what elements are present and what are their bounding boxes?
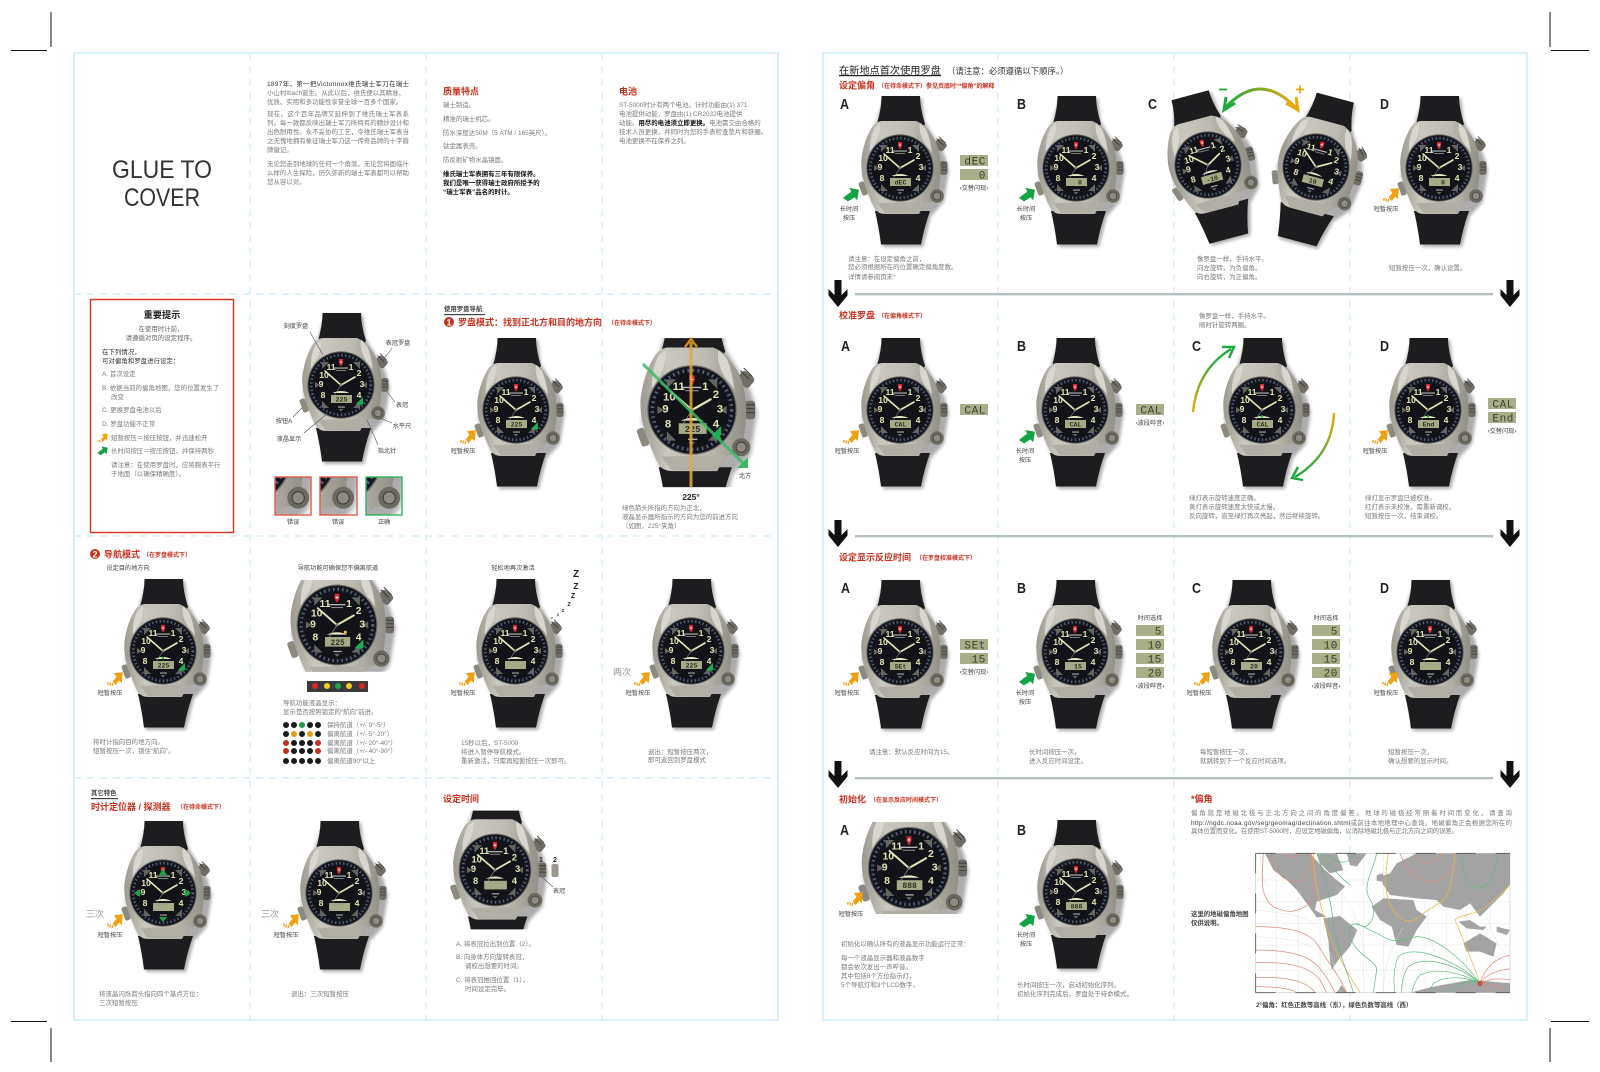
heading: other features: （在待命模式下） — [177, 803, 225, 811]
step B: initialization: 长时间 — [1017, 931, 1035, 939]
panel: set time: 表冠 — [553, 887, 565, 895]
section divider 1 — [828, 280, 1520, 307]
step C: rotate twice: 反向旋转，直至绿灯再次亮起，然后继续旋转。 — [1189, 511, 1324, 520]
text block: brand history: 出色耐用性。永不妥协的工艺，令维氏瑞士军表当 — [267, 127, 409, 136]
heading: initialization — [839, 794, 942, 804]
step D: calibration end: End — [1492, 414, 1514, 426]
step D: calibration end: 短暂按压一次，结束调校。 — [1365, 511, 1442, 520]
step C: response time: 短暂按压 — [1187, 689, 1211, 697]
watch: exit navigation — [613, 579, 740, 764]
step D: calibration end — [1363, 338, 1516, 520]
heading: other features: 其它特色 — [91, 788, 117, 797]
step B: declination — [1017, 96, 1125, 247]
step A: declination: 按压 — [843, 214, 855, 222]
step B: response time: 进入反应时间设定。 — [1029, 756, 1087, 765]
watch: locator on: 短暂按压 — [98, 931, 122, 939]
figure: watch anatomy: 指北针 — [378, 447, 396, 455]
glue to cover note: GLUE TO — [112, 156, 212, 184]
panel: important notice: 可对偏角和罗盘进行设定： — [102, 356, 179, 365]
watch: easy reactivation: 重新激活，只需再短暂按压一次即可。 — [461, 756, 570, 765]
step D: confirm: 短暂按压一次，确认设置。 — [1389, 263, 1466, 272]
watch: easy reactivation: 短暂按压 — [451, 689, 475, 697]
step A: declination: 您必须根据所在的位置确定偏角度数。 — [848, 262, 957, 271]
watch: stay on course with LED legend: 偏离航道（+/- 5°-20°） — [327, 729, 393, 738]
step A: initialization: 5个导航灯和3个LCD数字。 — [841, 980, 919, 989]
step A: declination: 0 — [979, 170, 986, 182]
step A: declination: ‹交替闪现› — [960, 184, 988, 192]
panel: set time: 调校出想要的时间。 — [465, 961, 523, 970]
text block: brand history: 小山村Ibach诞生。从此以后，维氏便以其精准、 — [267, 88, 405, 97]
panel: important notice: 请注意：在使用罗盘时，应将腕表平行 — [111, 460, 221, 469]
step C: response time: 20 — [1324, 668, 1338, 680]
watch: easy reactivation: 将进入暂停导航模式。 — [461, 747, 525, 756]
step C: rotate to adjust: 向左旋转，为负偏角。 — [1197, 263, 1261, 272]
text block: declination explanation: 仅供说明。 — [1191, 918, 1223, 927]
watch: stay on course with LED legend — [283, 564, 398, 764]
watch: locator on — [86, 821, 212, 1007]
step A: initialization: 初始化以确认所有的液晶显示功能运行正常： — [841, 939, 970, 948]
watch: locator on: 将液晶闪烁箭头指向四个基点方位： — [99, 989, 202, 998]
heading: set declination: （在待命模式下）参见页底时“*偏角”的解释 — [878, 82, 994, 90]
text block: brand history: 您从容以对。 — [267, 177, 306, 186]
watch: easy reactivation: Z — [571, 593, 576, 600]
watch: easy reactivation: Z — [573, 581, 579, 591]
step D: calibration end: D — [1380, 338, 1389, 355]
watch: set destination: 225 — [158, 662, 169, 670]
step C: response time: 20 — [1250, 664, 1258, 670]
step A: declination: dEC — [964, 156, 986, 168]
panel: set time: B. 向身体方向旋转表冠， — [456, 952, 528, 961]
step A: initialization: 都会依次发出一声哔音。 — [841, 962, 912, 971]
step C: response time: 15 — [1324, 654, 1338, 666]
text block: quality features: 防水深度达50M（5 ATM / 165英尺）。 — [443, 128, 551, 137]
heading: set declination — [839, 80, 994, 90]
text block: declination explanation: 这里的地磁偏角地图 — [1191, 909, 1249, 918]
heading: display response time: 设定显示反应时间 — [839, 552, 911, 562]
step A: declination — [840, 96, 988, 281]
step B: calibrate: B — [1017, 338, 1026, 355]
step A: calibrate — [835, 338, 988, 489]
step B: declination: B — [1017, 96, 1026, 113]
step A: response time: 请注意：默认反应时间为15。 — [869, 747, 953, 756]
section divider 2 — [828, 520, 1520, 547]
step D: calibration end: CAL — [1492, 400, 1514, 412]
figure: watch anatomy: 表冠 — [396, 401, 408, 409]
page title: （请注意：必须遵循以下顺序。） — [947, 66, 1068, 76]
panel: set time: 时间设定完毕。 — [465, 984, 510, 993]
watch: compass mode press: 225 — [511, 422, 522, 428]
step A: initialization: 短暂按压 — [839, 910, 863, 918]
watch: exit navigation: 即可返回到罗盘模式 — [648, 755, 707, 764]
watch: stay on course with LED legend: 导航功能液晶显示： — [283, 698, 341, 707]
watch: compass bearing diagram: 225° — [682, 492, 700, 502]
text block: brand history: 牌徽记。 — [267, 145, 293, 154]
step D: response time: 确认想要的显示时间。 — [1388, 756, 1452, 765]
watch: easy reactivation: 轻松地再次激活 — [491, 564, 535, 572]
step A: calibrate: 短暂按压 — [835, 447, 859, 455]
text block: quality features: 瑞士制造。 — [443, 100, 475, 109]
text block: quality features: 我们是唯一获得瑞士政府所授予的 — [443, 178, 540, 187]
step C: rotate twice: C — [1192, 338, 1201, 355]
watch: compass bearing diagram — [622, 314, 757, 530]
text block: battery: 电池 — [619, 86, 637, 96]
level check thumbnails: 错误 — [332, 518, 344, 526]
heading: calibrate compass: 校准罗盘 — [839, 310, 875, 320]
heading: set declination: 设定偏角 — [839, 80, 875, 90]
step C: rotate to adjust: 10 — [1308, 177, 1317, 186]
watch: easy reactivation: 15秒以后，ST-5000 — [461, 738, 519, 747]
step A: response time: A — [841, 580, 850, 597]
panel: important notice: 短暂按压＝按压按钮，并迅速松开 — [111, 433, 208, 442]
step B: calibrate: 按压 — [1019, 456, 1031, 464]
text block: declination explanation — [1191, 793, 1513, 927]
level check thumbnails: 正确 — [378, 518, 390, 526]
step C: rotate to adjust — [1148, 83, 1382, 281]
figure: watch anatomy: 液晶显示 — [277, 435, 301, 443]
text block: declination explanation: http://ngdc.noaa.gov/seg/geomag/declination.shtml或前往本地地理中心查询。地磁偏角正会根据您所在的 — [1191, 818, 1512, 827]
step D: confirm: D — [1380, 96, 1389, 113]
step A: response time: ‹交替闪现› — [960, 668, 988, 676]
step B: calibrate: 长时间 — [1016, 447, 1034, 455]
step B: response time: 20 — [1148, 668, 1162, 680]
step A: response time: 短暂按压 — [835, 689, 859, 697]
text block: brand history: 列。每一款都反映出瑞士军刀所特有的精妙设计和 — [267, 118, 409, 127]
figure: watch anatomy: 表冠罗盘 — [386, 339, 410, 347]
watch: exit navigation: 退出：短暂按压两次， — [648, 747, 712, 756]
watch: stay on course with LED legend: 偏离航道（+/- 40°-90°） — [327, 746, 397, 755]
panel: important notice: A. 首次设定 — [102, 369, 136, 378]
figure: watch anatomy — [276, 313, 411, 464]
text block: brand history: 现在，这个百年品牌又延伸到了维氏瑞士军表系 — [267, 109, 410, 118]
text block: battery: 电池提供动能，罗盘由(1) CR2032电池提供 — [619, 109, 743, 118]
heading: compass mode — [444, 304, 656, 328]
figure: watch anatomy: 水平尺 — [393, 422, 411, 430]
chart: magnetic declination world map — [1256, 853, 1513, 993]
text block: battery — [619, 86, 767, 145]
level check thumbnails — [172, 338, 408, 579]
text block: brand history: 么样的人生探险，历久弥新的瑞士军表都可以帮助 — [267, 168, 409, 177]
text block: battery: 技术人员更换，并同时为您的手表检查垫片和铁圈。 — [619, 127, 767, 136]
step A: response time: SEt — [895, 664, 906, 670]
step B: calibrate: CAL — [1070, 422, 1081, 428]
step C: response time: C — [1192, 580, 1201, 597]
text block: declination explanation: 具体位置而变化。在使用ST-5000时，应设定地磁偏角，以消除地磁北极与正北方向之间的误差。 — [1191, 826, 1458, 835]
watch: compass bearing diagram: 绿色箭头所指的方向为正北， — [622, 503, 706, 512]
figure: watch anatomy: 刻度罗盘 — [284, 322, 308, 330]
watch: stay on course with LED legend: 保持航道（+/- 0°-5°） — [327, 720, 390, 729]
heading: navigation mode: 导航模式 — [104, 548, 140, 560]
step C: response time: 每短暂按压一次， — [1200, 747, 1252, 756]
step A: initialization — [838, 822, 970, 988]
text block: declination explanation: 偏角就是地磁北极与正北方向之间的角度偏差。地球的磁极经常随着时间而变化。请查询 — [1191, 808, 1513, 817]
map caption: 2°偏角：红色正数等高线（东），绿色负数等高线（西） — [1256, 1000, 1412, 1009]
step A: response time: 15 — [972, 654, 986, 666]
step D: confirm — [1374, 96, 1488, 272]
figure: watch anatomy: 按钮A — [276, 417, 293, 425]
step A: calibrate: A — [841, 338, 850, 355]
step A: declination: 长时间 — [840, 205, 858, 213]
step B: calibrate — [1016, 338, 1164, 489]
watch: set destination: 设定目的地方向 — [106, 564, 150, 572]
step C: response time — [1187, 580, 1340, 765]
watch: set destination — [93, 564, 212, 755]
step A: calibrate: CAL — [964, 406, 986, 418]
step D: calibration end: ‹交替闪现› — [1488, 427, 1516, 435]
heading: initialization: 初始化 — [839, 794, 866, 804]
text block: quality features: 防反射矿物水晶镜面。 — [443, 155, 507, 164]
step C: rotate twice: 黄灯表示旋转速度太快或太慢。 — [1189, 502, 1279, 511]
watch: set destination: 短暂按压 — [98, 689, 122, 697]
step D: calibration end: 短暂按压 — [1363, 447, 1387, 455]
watch: locator exit: 三次 — [261, 908, 279, 919]
panel: important notice: 长时间按压＝按压按钮，并保持两秒 — [111, 446, 215, 455]
step C: rotate twice: 顺时针旋转两圈。 — [1199, 320, 1251, 329]
step A: declination: dEC — [895, 180, 906, 186]
step B: initialization: 初始化序列完成后，罗盘处于待命模式。 — [1017, 989, 1133, 998]
watch: stay on course with LED legend: 导航功能可确保您不偏离航道 — [298, 564, 378, 572]
step B: initialization: B — [1017, 822, 1026, 839]
panel: set time: A. 将表冠拉出到位置（2）。 — [456, 939, 535, 948]
heading: calibrate compass: （在偏角模式下） — [878, 312, 926, 320]
page title — [839, 64, 1068, 77]
watch: compass bearing diagram: 液晶显示器所指示的方向为您的前进方向 — [622, 512, 738, 521]
step C: response time: ‹波段哔音› — [1312, 682, 1340, 690]
text block: quality features: 钛金属表壳。 — [443, 141, 482, 150]
text block: brand history: 1897年，第一把Victorinox维氏瑞士军刀在瑞士 — [267, 79, 410, 88]
step B: initialization: 长时间按压一次，启动初始化序列。 — [1017, 980, 1120, 989]
text block: brand history: 无论您走到地球的任何一个角落，无论您将面临什 — [267, 159, 410, 168]
text block: battery: 动能。用尽的电池须立即更换。电池需交由合格的 — [619, 118, 761, 127]
step A: initialization: A — [840, 822, 849, 839]
watch: compass bearing diagram: 225 — [685, 425, 701, 435]
watch: easy reactivation: Z — [562, 608, 565, 613]
panel: important notice: D. 罗盘功能不正常 — [102, 419, 155, 428]
panel: set time: 1 — [539, 857, 543, 864]
step C: rotate twice: CAL — [1257, 422, 1268, 428]
text block: brand history: 优质、实用和多功能性享誉全球一百多个国家。 — [267, 97, 402, 106]
step B: response time: 15 — [1148, 654, 1162, 666]
step B: response time: 按压 — [1019, 698, 1031, 706]
heading: display response time: （在罗盘校准模式下） — [916, 554, 976, 562]
watch: stay on course with LED legend: 225 — [330, 639, 345, 648]
step C: response time: 就跳转到下一个反应时间选项。 — [1200, 756, 1290, 765]
heading: compass mode: 罗盘模式：找到正北方和目的地方向 — [458, 316, 602, 328]
panel: set time — [443, 792, 565, 993]
step B: response time: 15 — [1074, 664, 1082, 670]
watch: easy reactivation: Z — [567, 602, 571, 608]
watch: locator exit: 短暂按压 — [274, 931, 298, 939]
step A: response time — [835, 580, 988, 756]
text block: quality features: 质量特点 — [443, 86, 479, 96]
step A: initialization: 888 — [902, 882, 917, 891]
text block: declination explanation: *偏角 — [1191, 793, 1213, 804]
watch: compass bearing diagram: 北方 — [739, 472, 751, 480]
step C: response time: 时间选择 — [1314, 614, 1339, 622]
step B: initialization — [1017, 820, 1133, 998]
watch: easy reactivation: Z — [551, 616, 553, 620]
step A: calibrate: CAL — [895, 422, 906, 428]
watch: stay on course with LED legend: 显示是否按照锁定的“航向”前进。 — [283, 707, 377, 716]
step D: response time: D — [1380, 580, 1389, 597]
step B: declination: 按压 — [1020, 214, 1032, 222]
step B: calibrate: CAL — [1140, 406, 1162, 418]
text block: quality features: “瑞士军表”品名的时计。 — [443, 187, 514, 196]
watch: stay on course with LED legend: 偏离航道90°以上 — [327, 756, 376, 765]
step D: response time — [1374, 580, 1479, 765]
step B: response time: 长时间 — [1016, 689, 1034, 697]
step C: rotate to adjust: 像罗盘一样，手持水平。 — [1197, 254, 1268, 263]
watch: easy reactivation: Z — [557, 613, 560, 617]
step D: response time: 短暂按压一次， — [1388, 747, 1433, 756]
watch: locator on: 三次 — [86, 908, 104, 919]
panel: set time: 设定时间 — [443, 793, 479, 804]
heading: compass mode: （在待命模式下） — [608, 319, 656, 327]
step D: confirm: 0 — [1441, 180, 1445, 186]
step A: declination: A — [840, 96, 849, 113]
step D: calibration end: End — [1423, 422, 1434, 428]
step B: response time: ‹波段哔音› — [1136, 682, 1164, 690]
step A: response time: SEt — [964, 640, 986, 652]
text block: quality features: 维氏瑞士军表拥有三年有限保养。 — [443, 169, 540, 178]
text block: quality features — [443, 86, 551, 196]
heading: other features: 时计定位器 / 探测器 — [91, 801, 171, 812]
step A: declination: 详情请参阅页末* — [848, 272, 896, 281]
panel: important notice: 请遵循对页的设定程序。 — [126, 333, 196, 342]
panel: important notice: 于地面（以确保精确度）。 — [111, 469, 185, 478]
watch: stay on course with LED legend: 偏离航道（+/- 20°-40°） — [327, 738, 397, 747]
glue to cover note: COVER — [124, 184, 200, 212]
watch: exit navigation: 短暂按压 — [626, 689, 650, 697]
step B: initialization: 888 — [1071, 904, 1082, 910]
figure: watch anatomy: 225 — [336, 396, 347, 404]
heading: navigation mode — [90, 548, 191, 560]
heading: navigation mode: （在罗盘模式下） — [143, 551, 191, 559]
panel: important notice: 在使用时计前， — [138, 324, 184, 333]
step A: declination: 请注意：在设定偏角之前， — [848, 254, 925, 263]
step C: rotate twice: 像罗盘一样，手持水平。 — [1199, 311, 1270, 320]
step B: response time: 5 — [1155, 626, 1162, 638]
step C: rotate to adjust: C — [1148, 96, 1157, 113]
step C: rotate to adjust: 向右旋转，为正偏角。 — [1197, 272, 1261, 281]
heading: display response time — [839, 552, 976, 562]
text block: quality features: 精准的瑞士机芯。 — [443, 114, 495, 123]
text block: brand history — [267, 79, 410, 186]
heading: compass mode: 1 — [446, 318, 452, 328]
text block: brand history: 之无愧地拥有象征瑞士军刀这一传奇品牌的十字盾 — [267, 136, 410, 145]
panel: important notice: 改变 — [111, 392, 124, 401]
step A: initialization: 其中包括8个方位指示灯， — [841, 971, 915, 980]
text block: battery: ST-5000时计有两个电池。计时功能由(1) 371 — [619, 100, 748, 109]
step B: response time: B — [1017, 580, 1026, 597]
section divider 3 — [828, 761, 1520, 788]
panel: set time: C. 将表冠推回位置（1）， — [456, 975, 529, 984]
watch: compass mode press — [451, 338, 565, 489]
panel: important notice: C. 更换罗盘电池以后 — [102, 405, 162, 414]
panel: important notice — [90, 300, 234, 532]
watch: compass bearing diagram: （如图，225°夹角） — [622, 521, 680, 530]
watch: locator exit: 退出：三次短暂按压 — [291, 989, 350, 998]
watch: easy reactivation: Z — [573, 569, 579, 580]
heading: compass mode: 使用罗盘导航 — [444, 304, 483, 313]
step B: response time: 时间选择 — [1138, 614, 1163, 622]
step A: initialization: 每一个液晶显示器和液晶数字 — [841, 953, 925, 962]
step C: rotate twice — [1189, 311, 1334, 520]
step D: calibration end: 绿灯显示罗盘已被校准。 — [1365, 493, 1436, 502]
heading: initialization: （在显示反应时间模式下） — [870, 796, 942, 804]
step B: declination: 长时间 — [1017, 205, 1035, 213]
watch: easy reactivation — [451, 564, 579, 765]
page title: 在新地点首次使用罗盘 — [839, 64, 941, 77]
text block: battery: 电池更换不在保养之列。 — [619, 136, 690, 145]
step D: calibration end: 红灯表示未校准，需重新调校。 — [1365, 502, 1455, 511]
watch: exit navigation: 两次 — [613, 666, 631, 677]
step B: initialization: 按压 — [1020, 940, 1032, 948]
panel: important notice: 在下列情况， — [102, 347, 141, 356]
step B: response time: 10 — [1148, 640, 1162, 652]
panel: important notice: 重要提示 — [144, 309, 180, 320]
step B: response time — [1016, 580, 1164, 765]
watch: set destination: 将时计指向目的地方向。 — [93, 737, 164, 746]
watch: compass mode press: 短暂按压 — [451, 447, 475, 455]
step C: rotate to adjust: -10 — [1206, 174, 1219, 184]
watch: locator on: 三次短暂按压 — [99, 998, 138, 1007]
step B: calibrate: ‹波段哔音› — [1136, 419, 1164, 427]
step B: declination: 0 — [1078, 180, 1082, 186]
heading: other features — [91, 788, 225, 812]
watch: set destination: 短暂按压一次，锁住“航向”。 — [93, 746, 175, 755]
watch: locator exit — [261, 821, 388, 998]
level check thumbnails: 错误 — [287, 518, 299, 526]
step C: rotate twice: 绿灯表示旋转速度正确。 — [1189, 493, 1260, 502]
step B: response time: 长时间按压一次， — [1029, 747, 1081, 756]
heading: calibrate compass — [839, 310, 926, 320]
watch: exit navigation: 225 — [686, 662, 697, 670]
heading: navigation mode: 2 — [92, 550, 98, 560]
step C: response time: 10 — [1324, 640, 1338, 652]
step D: confirm: 短暂按压 — [1374, 205, 1398, 213]
panel: set time: 2 — [553, 857, 557, 864]
glue to cover note — [112, 156, 212, 212]
step C: response time: 5 — [1331, 626, 1338, 638]
step D: response time: 短暂按压 — [1374, 689, 1398, 697]
panel: important notice: B. 依据当前的偏角地图，您的位置发生了 — [102, 383, 219, 392]
